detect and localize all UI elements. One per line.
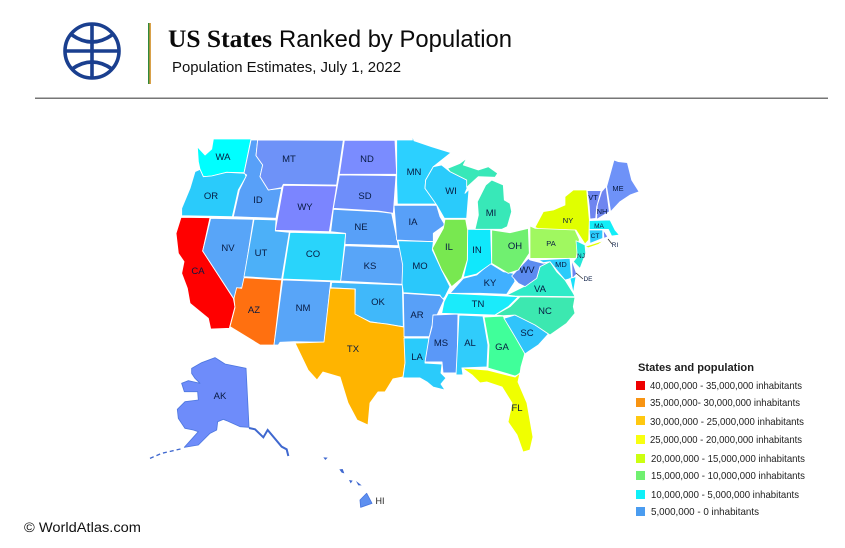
state: New Mexico xyxy=(274,280,331,345)
state: South Dakota xyxy=(333,175,396,213)
legend row 8: 5,000,000 - 0 inhabitants xyxy=(651,507,759,518)
state: Kentucky xyxy=(450,263,515,294)
state: Maryland: MD xyxy=(555,260,567,269)
state: Hawaii: HI xyxy=(376,496,384,506)
state: West Virginia: WV xyxy=(519,265,535,276)
state: Arizona xyxy=(230,278,282,345)
copyright: © WorldAtlas.com xyxy=(24,520,141,535)
state: Arkansas xyxy=(403,293,444,337)
title: US States xyxy=(168,26,272,53)
state: Wyoming xyxy=(275,185,337,232)
state: Oklahoma: OK xyxy=(371,297,386,308)
state: Mississippi: MS xyxy=(434,338,448,349)
subtitle: Population Estimates, July 1, 2022 xyxy=(172,59,401,76)
state: Ohio xyxy=(492,228,529,273)
state: Michigan: MI xyxy=(486,208,496,219)
title: Ranked by Population xyxy=(279,26,512,53)
state: New York xyxy=(535,190,602,247)
state: Indiana xyxy=(463,229,492,277)
state: Kansas xyxy=(341,246,403,284)
header rule xyxy=(35,98,828,99)
state: Rhode Island: RI xyxy=(612,242,618,249)
state: Wyoming: WY xyxy=(297,202,313,213)
state: Louisiana: LA xyxy=(411,352,423,363)
state: Delaware: DE xyxy=(583,276,593,283)
state: Washington xyxy=(197,139,251,177)
state: North Carolina xyxy=(495,297,575,335)
state: Utah xyxy=(244,219,289,279)
state: Alaska xyxy=(150,358,288,458)
state: Indiana: IN xyxy=(472,245,482,256)
state: Tennessee xyxy=(442,293,518,315)
state: Nebraska: NE xyxy=(354,222,368,233)
legend row 6: 15,000,000 - 10,000,000 inhabitants xyxy=(651,471,805,482)
state: Colorado: CO xyxy=(306,249,320,260)
state: Connecticut: CT xyxy=(591,233,599,240)
state: Connecticut xyxy=(589,230,603,243)
state: Utah: UT xyxy=(255,248,268,259)
state: Alabama xyxy=(456,315,488,375)
state: Oklahoma xyxy=(331,282,403,327)
legend title: States and population xyxy=(638,362,754,374)
legend row 1: 40,000,000 - 35,000,000 inhabitants xyxy=(650,381,802,392)
legend row 4: 25,000,000 - 20,000,000 inhabitants xyxy=(650,435,802,446)
state: Mississippi xyxy=(425,314,458,373)
state: Ohio: OH xyxy=(508,241,522,252)
legend row 3: 30,000,000 - 25,000,000 inhabitants xyxy=(650,417,804,428)
state: Pennsylvania xyxy=(530,226,579,258)
state: Nevada: NV xyxy=(221,243,235,254)
state: Louisiana xyxy=(403,338,446,390)
state: Texas xyxy=(295,288,405,425)
state: Vermont: VT xyxy=(588,193,598,202)
state: New Jersey: NJ xyxy=(577,253,585,260)
state: Missouri xyxy=(398,241,450,301)
state: Georgia: GA xyxy=(495,342,510,353)
state: Virginia: VA xyxy=(534,284,547,295)
state: Nevada xyxy=(203,218,253,299)
state: Illinois xyxy=(432,219,468,287)
state: New Hampshire: NH xyxy=(597,207,607,216)
title xyxy=(168,26,512,53)
state: Missouri: MO xyxy=(412,261,428,272)
legend xyxy=(636,362,805,518)
state: Alaska: AK xyxy=(214,391,227,402)
state: New Mexico: NM xyxy=(296,303,310,314)
state: Iowa xyxy=(394,205,445,242)
state: Colorado xyxy=(283,232,346,281)
state: West Virginia xyxy=(512,258,550,287)
state: Montana xyxy=(256,140,343,190)
state: Massachusetts xyxy=(589,220,619,236)
state: Kentucky: KY xyxy=(484,278,497,289)
state: California xyxy=(176,217,235,329)
legend row 7: 10,000,000 - 5,000,000 inhabitants xyxy=(651,490,799,501)
state: Georgia xyxy=(484,316,525,376)
state: Virginia xyxy=(507,262,575,297)
state: Alabama: AL xyxy=(464,338,476,349)
state: Rhode Island xyxy=(603,230,618,249)
state: Maine: ME xyxy=(612,184,624,193)
header accent bar xyxy=(148,23,151,84)
state: Arkansas: AR xyxy=(410,310,424,321)
state: South Carolina: SC xyxy=(520,328,534,339)
legend row 2: 35,000,000- 30,000,000 inhabitants xyxy=(650,398,800,409)
icon: globe logo xyxy=(65,24,119,78)
state: Wisconsin xyxy=(425,165,469,218)
state: North Dakota xyxy=(339,140,397,174)
state: Tennessee: TN xyxy=(472,299,484,310)
state: Florida xyxy=(462,368,533,452)
legend row 5: 20,000,000 - 15,000,000 inhabitants xyxy=(651,454,805,465)
state: Pennsylvania: PA xyxy=(546,239,556,248)
state: Minnesota: MN xyxy=(407,167,422,178)
state: Iowa: IA xyxy=(409,217,418,228)
state: Oregon: OR xyxy=(204,191,218,202)
state: Oregon xyxy=(182,169,246,217)
map: US states xyxy=(150,135,639,507)
state: Illinois: IL xyxy=(445,242,453,253)
state: Montana: MT xyxy=(282,154,296,165)
state: Arizona: AZ xyxy=(248,305,260,316)
state: Vermont xyxy=(587,191,601,219)
state: Hawaii xyxy=(323,457,384,507)
state: Kansas: KS xyxy=(364,261,376,272)
state: Maryland xyxy=(538,258,572,280)
state: Idaho xyxy=(233,140,282,218)
state: Massachusetts: MA xyxy=(594,223,605,230)
state: Washington: WA xyxy=(216,152,231,163)
state: North Carolina: NC xyxy=(538,306,552,317)
state: Wisconsin: WI xyxy=(445,186,457,197)
state: Florida: FL xyxy=(511,403,523,414)
state: New Jersey xyxy=(573,241,586,268)
state: Texas: TX xyxy=(347,344,360,355)
state: Nebraska xyxy=(331,209,398,246)
state: South Carolina xyxy=(504,315,548,354)
state: South Dakota: SD xyxy=(358,191,372,202)
state: Idaho: ID xyxy=(253,195,263,206)
state: Minnesota xyxy=(397,135,451,204)
state: Virginia eastern shore xyxy=(570,277,576,293)
state: Michigan xyxy=(448,158,512,229)
state: North Dakota: ND xyxy=(360,154,374,165)
state: California: CA xyxy=(191,266,205,277)
state: New Hampshire xyxy=(597,187,609,219)
state: Maine xyxy=(607,160,639,212)
state: Delaware xyxy=(572,260,593,283)
state: New York: NY xyxy=(563,216,573,225)
